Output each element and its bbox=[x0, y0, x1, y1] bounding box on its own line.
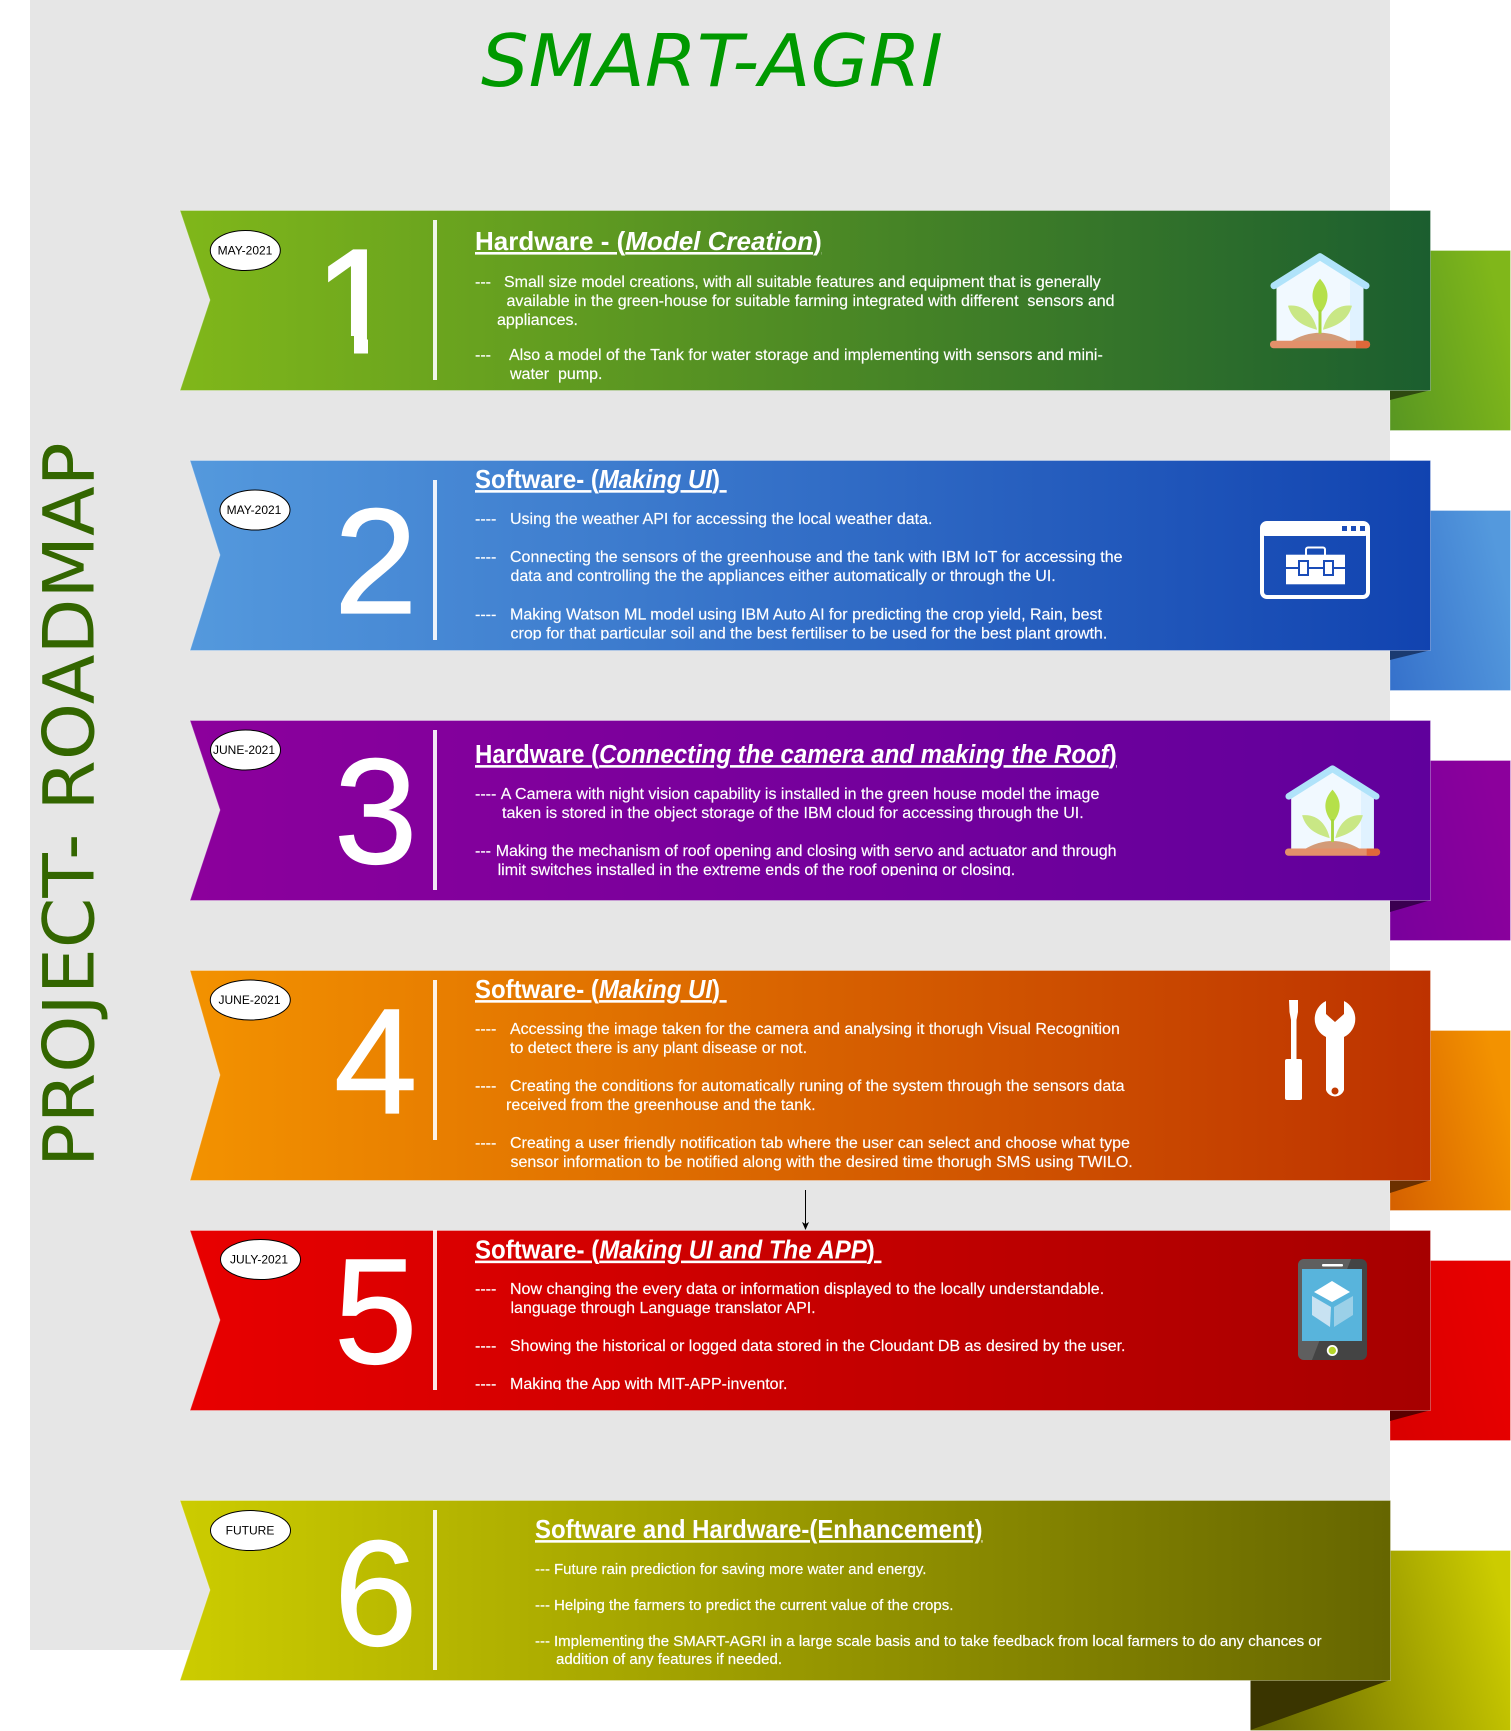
description 5: Now changing the every data or information displayed to the locally understandable. bbox=[510, 1281, 1104, 1298]
description 4 bbox=[475, 1021, 1133, 1171]
heading 6: Software and Hardware-(Enhancement) bbox=[535, 1515, 982, 1544]
description 2: ---- bbox=[475, 549, 496, 566]
description 5: language through Language translator API. bbox=[510, 1300, 816, 1317]
description 6: --- bbox=[535, 1561, 550, 1578]
step number 4: 4 bbox=[334, 977, 417, 1145]
description 4: sensor information to be notified along with the desired time thorugh SMS using TWILO. bbox=[510, 1154, 1133, 1171]
description 5: ---- bbox=[475, 1376, 496, 1393]
vertical heading: project roadmap: PROJECT- ROADMAP bbox=[28, 443, 110, 1167]
description 2: Connecting the sensors of the greenhouse and the tank with IBM IoT for accessing the bbox=[510, 549, 1123, 566]
description 1: --- bbox=[475, 347, 491, 364]
ribbon fold shadow 5 bbox=[1390, 1410, 1431, 1421]
description 2: crop for that particular soil and the best fertiliser to be used for the best plant growth. bbox=[510, 626, 1107, 642]
ribbon fold shadow 6 bbox=[1250, 1680, 1390, 1730]
date badge 6: FUTURE bbox=[226, 1524, 274, 1538]
description 5: ---- bbox=[475, 1281, 496, 1298]
step number 3: 3 bbox=[334, 727, 417, 895]
description 5: Showing the historical or logged data stored in the Cloudant DB as desired by the user. bbox=[510, 1338, 1125, 1355]
description 4: to detect there is any plant disease or not. bbox=[510, 1040, 807, 1057]
divider 6 bbox=[433, 1510, 437, 1670]
heading 2: Software- (Making UI) bbox=[475, 465, 727, 494]
ribbon tail 2 bbox=[1390, 510, 1510, 690]
date badge 2: MAY-2021 bbox=[227, 503, 282, 517]
description 6: --- bbox=[535, 1597, 550, 1614]
description 2: Using the weather API for accessing the local weather data. bbox=[510, 511, 932, 528]
description 2 bbox=[475, 511, 1123, 642]
description 2: Making Watson ML model using IBM Auto AI for predicting the crop yield, Rain, best bbox=[510, 606, 1103, 624]
ribbon banner 4 bbox=[190, 970, 1430, 1180]
heading 4: Software- (Making UI) bbox=[475, 975, 727, 1004]
panel: step 3 hardware camera and roof bbox=[190, 720, 1510, 940]
step number 6: 6 bbox=[334, 1509, 417, 1677]
date badge 5: JULY-2021 bbox=[230, 1252, 288, 1266]
panel: step 6 future enhancement bbox=[180, 1500, 1510, 1730]
description 4: Creating a user friendly notification tab where the user can select and choose what type bbox=[510, 1135, 1130, 1152]
ribbon tail 5 bbox=[1390, 1260, 1510, 1440]
divider 5 bbox=[433, 1230, 437, 1390]
date badge 3: JUNE-2021 bbox=[213, 743, 275, 757]
panel: step 2 software making UI bbox=[190, 460, 1510, 690]
description 1 bbox=[475, 274, 1115, 383]
ribbon banner 6 bbox=[180, 1500, 1390, 1680]
description 3: limit switches installed in the extreme ends of the roof opening or closing. bbox=[498, 862, 1015, 879]
date badge 1 bbox=[210, 230, 280, 270]
step number 2: 2 bbox=[334, 477, 417, 645]
ribbon fold shadow 1 bbox=[1390, 390, 1431, 400]
description 4: Accessing the image taken for the camera and analysing it thorugh Visual Recognition bbox=[510, 1021, 1120, 1038]
ribbon banner 2 bbox=[190, 460, 1430, 650]
date badge 5 bbox=[220, 1240, 300, 1280]
ribbon tail 6 bbox=[1250, 1550, 1510, 1730]
panel: step 5 software UI and app bbox=[190, 1227, 1510, 1440]
panel: step 4 software making UI bbox=[190, 970, 1510, 1210]
description 1: water pump. bbox=[509, 366, 602, 383]
description 4: ---- bbox=[475, 1078, 496, 1095]
ribbon tail 3 bbox=[1390, 760, 1510, 940]
description 6: addition of any features if needed. bbox=[556, 1651, 782, 1668]
description 4: ---- bbox=[475, 1021, 496, 1038]
description 5: ---- bbox=[475, 1338, 496, 1355]
ribbon banner 5 bbox=[190, 1230, 1430, 1410]
heading 3: Hardware (Connecting the camera and making the Roof) bbox=[475, 740, 1117, 769]
description 1: available in the green-house for suitable farming integrated with different sensors and bbox=[506, 293, 1115, 310]
description 3: A Camera with night vision capability is installed in the green house model the image bbox=[501, 786, 1099, 803]
date badge 6 bbox=[210, 1510, 290, 1550]
description 6: Helping the farmers to predict the current value of the crops. bbox=[554, 1597, 953, 1614]
description 2: ---- bbox=[475, 606, 496, 624]
description 4: ---- bbox=[475, 1135, 496, 1152]
panel: step 1 hardware model creation bbox=[180, 210, 1510, 430]
description 4: Creating the conditions for automatically runing of the system through the sensors data bbox=[510, 1078, 1125, 1095]
description 3: taken is stored in the object storage of the IBM cloud for accessing through the UI. bbox=[502, 805, 1084, 822]
description 3 bbox=[475, 786, 1117, 879]
description 3: ---- bbox=[475, 786, 496, 803]
date badge 1: MAY-2021 bbox=[218, 244, 273, 258]
description 1: Also a model of the Tank for water storage and implementing with sensors and mini- bbox=[509, 347, 1103, 364]
date badge 4 bbox=[210, 980, 290, 1020]
ribbon fold shadow 4 bbox=[1390, 1180, 1431, 1193]
description 4: received from the greenhouse and the tank. bbox=[506, 1097, 816, 1114]
date badge 4: JUNE-2021 bbox=[218, 993, 281, 1007]
ribbon fold shadow 2 bbox=[1390, 650, 1431, 660]
divider 3 bbox=[433, 730, 437, 890]
ribbon banner 1 bbox=[180, 210, 1430, 390]
icon: greenhouse with plant bbox=[1285, 769, 1380, 856]
description 3: Making the mechanism of roof opening and closing with servo and actuator and through bbox=[496, 843, 1117, 860]
step number 5: 5 bbox=[334, 1227, 417, 1395]
description 1: Small size model creations, with all suitable features and equipment that is generally bbox=[504, 274, 1101, 291]
ribbon banner 3 bbox=[190, 720, 1430, 900]
description 2: ---- bbox=[475, 511, 496, 528]
description 3: --- bbox=[475, 843, 491, 860]
description 1: appliances. bbox=[497, 312, 578, 329]
description 6: Future rain prediction for saving more water and energy. bbox=[554, 1561, 926, 1578]
divider 2 bbox=[433, 480, 437, 640]
description 5: Making the App with MIT-APP-inventor. bbox=[510, 1376, 787, 1393]
description 1: --- bbox=[475, 274, 491, 291]
date badge 2 bbox=[220, 490, 290, 530]
description 6: --- bbox=[535, 1633, 550, 1650]
icon: screwdriver and wrench bbox=[1285, 1000, 1355, 1100]
description 6 bbox=[535, 1561, 1322, 1668]
description 5 bbox=[475, 1281, 1125, 1393]
icon: phone with cube bbox=[1298, 1259, 1367, 1360]
ribbon fold shadow 3 bbox=[1390, 900, 1431, 912]
description 2: data and controlling the the appliances either automatically or through the UI. bbox=[510, 568, 1056, 585]
arrow: from step 4 to step 5 bbox=[802, 1190, 809, 1230]
heading 5: Software- (Making UI and The APP) bbox=[475, 1236, 881, 1265]
step number 1: 1 bbox=[316, 220, 397, 384]
divider 4 bbox=[433, 980, 437, 1140]
date badge 3 bbox=[210, 730, 280, 770]
description 6: Implementing the SMART-AGRI in a large scale basis and to take feedback from local farmers to do any chances or bbox=[554, 1633, 1322, 1650]
heading 1: Hardware - (Model Creation) bbox=[475, 226, 822, 256]
ribbon tail 1 bbox=[1390, 250, 1510, 430]
ribbon tail 4 bbox=[1390, 1030, 1510, 1210]
icon: toolbox in window bbox=[1262, 523, 1368, 597]
divider 1 bbox=[433, 220, 437, 380]
title: SMART-AGRI bbox=[481, 19, 943, 103]
icon: greenhouse with plant bbox=[1270, 257, 1370, 348]
